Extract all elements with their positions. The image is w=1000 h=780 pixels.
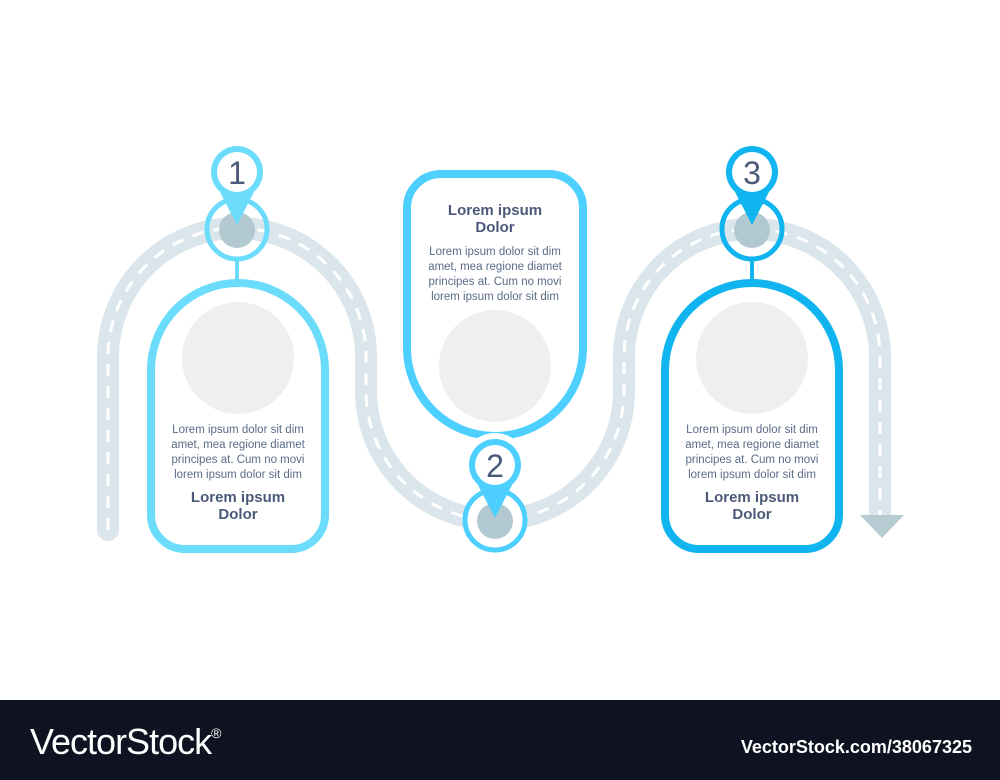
card 2: amet, mea regione diamet xyxy=(428,261,563,273)
card 3: Dolor xyxy=(732,506,772,523)
footer bar xyxy=(0,700,1000,780)
footer bar: VectorStock.com/38067325 xyxy=(741,737,972,757)
marker 3: 3 xyxy=(743,155,761,191)
card 1: Lorem ipsum xyxy=(191,489,285,506)
marker 2 xyxy=(463,433,527,550)
card 3: amet, mea regione diamet xyxy=(685,439,820,451)
marker 3 xyxy=(722,146,782,259)
card 1: Dolor xyxy=(218,506,258,523)
card 2 xyxy=(407,174,583,436)
card 2: Dolor xyxy=(475,219,515,236)
card 1: amet, mea regione diamet xyxy=(171,439,306,451)
arrow head xyxy=(860,515,904,538)
footer bar: ® xyxy=(211,725,222,741)
card 3: lorem ipsum dolor sit dim xyxy=(688,469,816,481)
card 1: lorem ipsum dolor sit dim xyxy=(174,469,302,481)
marker 1 xyxy=(207,146,267,259)
card 3 xyxy=(665,258,839,549)
card 2: principes at. Cum no movi xyxy=(429,276,561,288)
road xyxy=(108,228,880,530)
marker 2: 2 xyxy=(486,448,504,484)
card 1 xyxy=(151,258,325,549)
card 3: Lorem ipsum dolor sit dim xyxy=(686,424,818,436)
card 1: principes at. Cum no movi xyxy=(172,454,304,466)
card 2: lorem ipsum dolor sit dim xyxy=(431,291,559,303)
marker 1: 1 xyxy=(228,155,246,191)
card 2: Lorem ipsum xyxy=(448,202,542,219)
card 1: Lorem ipsum dolor sit dim xyxy=(172,424,304,436)
card 3: Lorem ipsum xyxy=(705,489,799,506)
card 2: Lorem ipsum dolor sit dim xyxy=(429,246,561,258)
card 3: principes at. Cum no movi xyxy=(686,454,818,466)
footer bar: VectorStock xyxy=(30,721,211,762)
